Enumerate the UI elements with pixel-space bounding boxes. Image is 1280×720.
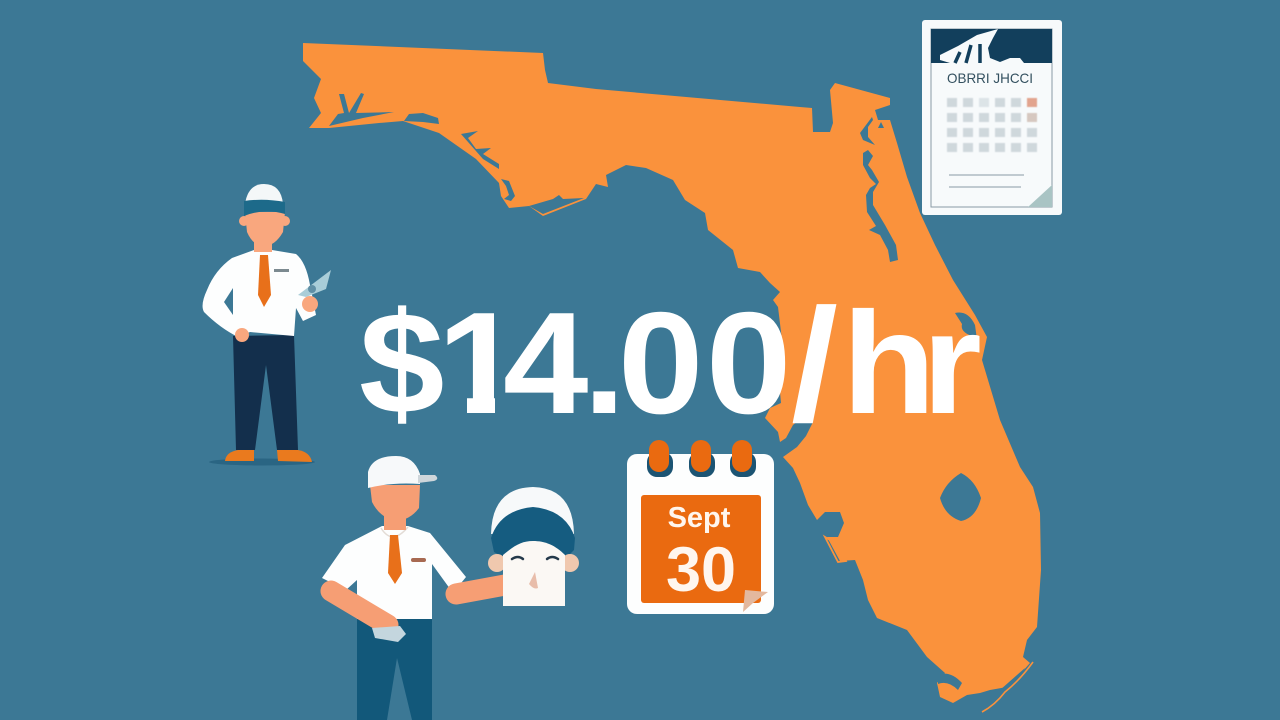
wrench (372, 626, 406, 642)
water: panhandle bays (329, 93, 584, 214)
month label: Sept (668, 502, 731, 534)
calendar header (931, 29, 1052, 63)
cap dome (491, 487, 574, 534)
tie (258, 255, 271, 307)
cap (244, 184, 285, 216)
headline wage (359, 275, 982, 454)
neck and head (239, 212, 290, 252)
barrier island (825, 537, 846, 562)
water: east coast lagoons (860, 117, 898, 262)
mask: smiling face on paper (488, 487, 579, 606)
map: Florida (303, 43, 1041, 715)
worker: holding mask (322, 456, 505, 720)
headline wage: hr (842, 282, 982, 444)
binding rings (647, 440, 756, 477)
water: south tip bays (938, 668, 1025, 715)
neck and head (370, 485, 420, 530)
shadow (209, 458, 315, 466)
trousers (357, 618, 432, 720)
cap (368, 456, 437, 488)
calendar title: OBRRI JHCCI (947, 70, 1033, 86)
tie (388, 535, 402, 584)
badge (274, 269, 289, 272)
nose (529, 572, 538, 588)
date panel (641, 495, 761, 603)
numeral 1 base trim (444, 394, 520, 416)
paper face (503, 541, 565, 606)
badge (411, 558, 426, 562)
calendar page fold (1028, 185, 1052, 207)
calendar document: top right (922, 20, 1062, 215)
trousers (233, 335, 298, 450)
eyes (512, 557, 558, 559)
ears (488, 554, 579, 572)
cash note and hand (298, 270, 331, 312)
calendar note lines (949, 175, 1024, 187)
headline wage: $14.00 (359, 282, 791, 444)
headline wage: / (791, 275, 838, 454)
hand on hip (235, 328, 249, 342)
hair (491, 507, 575, 558)
shirt (322, 526, 466, 619)
shoes (225, 450, 312, 462)
arms (331, 585, 505, 625)
day number: 30 (666, 535, 736, 605)
calendar: Sept 30 (627, 440, 774, 614)
water: Indian River inlet (955, 312, 978, 347)
water: Lake Okeechobee (940, 473, 981, 521)
worker: standing with cash (203, 184, 331, 466)
calendar date grid (947, 98, 1037, 152)
collar (381, 527, 408, 537)
page curl (743, 590, 768, 612)
shirt (203, 250, 316, 337)
keys (982, 662, 1033, 712)
